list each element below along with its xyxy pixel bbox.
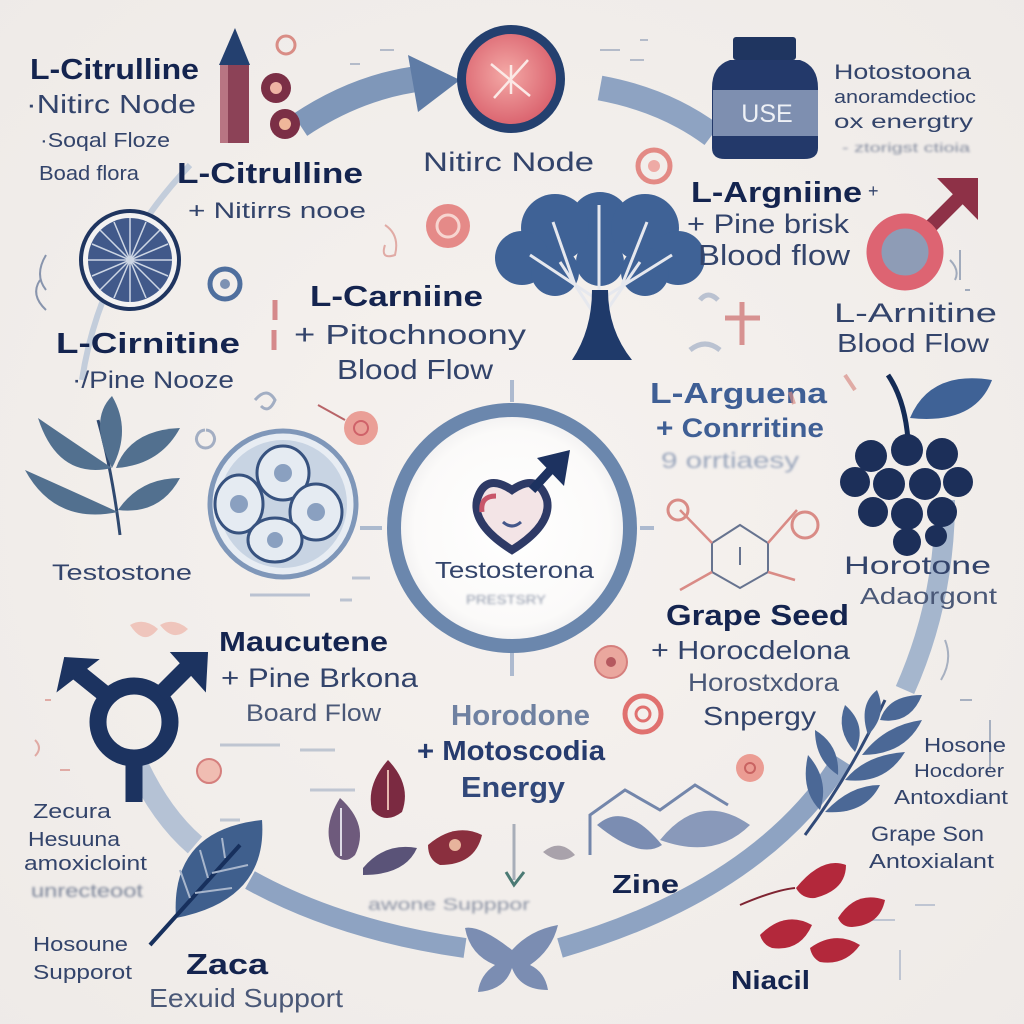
text: L-Cirnitine left: L-Cirnitine — [56, 328, 240, 360]
text: L-Citrulline block top left: Boad flora — [39, 163, 140, 185]
text: Testostone left: Testostone — [52, 560, 192, 585]
text: hormone top right: Hotostoona — [834, 61, 971, 84]
icon: heart male symbol — [476, 450, 570, 550]
text: L-Citrulline center: L-Citrulline — [177, 158, 363, 190]
text: L-Arguena: + Conrritine — [656, 413, 824, 443]
text: Zaca — [149, 949, 344, 1013]
text: Grape Seed: Horostxdora — [688, 669, 839, 697]
text: L-Arginine right: L-Argniine — [691, 177, 862, 209]
cycle arrows ring — [82, 78, 945, 948]
icon: leaf sprig left — [25, 396, 180, 535]
icon: red target circles — [210, 150, 670, 299]
text: Zacura left — [24, 801, 148, 984]
icon: supplement jar: USE — [741, 100, 793, 128]
text: Maucutene left: Board Flow — [246, 700, 382, 727]
text: Maucutene left: + Pine Brkona — [221, 663, 419, 693]
text: blurred hormone support: awone Supppor — [368, 895, 530, 914]
text: L-Carnitine center: L-Carniine — [310, 281, 483, 313]
icon: leaf sprig right — [805, 690, 922, 835]
icon: tree — [495, 192, 705, 360]
icon: molecule — [668, 500, 818, 590]
text: Zacura left: Supporot — [33, 962, 133, 984]
text: L-Arginine right: + — [868, 181, 879, 201]
text: Horodone centre: Energy — [461, 772, 565, 804]
central hub — [394, 410, 630, 646]
text: hormone antioxidant right: Antoxialant — [869, 851, 995, 873]
icon: small arrow down — [506, 824, 524, 885]
central hub: PRESTSRY — [466, 592, 546, 607]
text: hormone antioxidant right: Grape Son — [871, 823, 984, 846]
text: Grape Seed: Snpergy — [703, 701, 816, 731]
text: L-Arguena: 9 orrtiaesy — [661, 448, 799, 473]
icon: citrus slice — [81, 211, 179, 309]
text: Grape Seed: + Horocdelona — [651, 635, 851, 665]
icon: small coral circles — [197, 646, 764, 783]
text: Horotone Adaptogen right: Adaorgont — [860, 583, 998, 609]
icon: red goji berries — [740, 863, 885, 963]
text: Zacura left: amoxicloint — [24, 853, 148, 875]
text: L-Arguena: L-Arguena — [650, 378, 828, 410]
text: Horodone centre — [417, 700, 605, 804]
text: Zaca: Eexuid Support — [149, 983, 344, 1013]
icon: molecular leaves — [590, 785, 750, 855]
text: L-Arnitine right — [834, 298, 997, 358]
text: Horodone centre: + Motoscodia — [417, 735, 605, 766]
arrowhead: top — [408, 55, 460, 112]
text: Grape Seed — [651, 600, 851, 731]
text: hormone top right: anoramdectioc — [834, 87, 976, 107]
icon: small capsule rings — [261, 36, 300, 139]
text: Zacura left: Zecura — [33, 801, 112, 823]
text: L-Arginine right: Blood flow — [698, 240, 851, 272]
text: Zine: Zine — [612, 869, 679, 899]
text: L-Citrulline center — [177, 158, 366, 223]
text: Horotone Adaptogen right — [844, 552, 998, 609]
text: Horotone Adaptogen right: Horotone — [844, 552, 991, 580]
text: Zaca: Zaca — [186, 949, 269, 981]
text: Maucutene left: Maucutene — [219, 626, 388, 657]
text: L-Arguena — [650, 378, 828, 473]
text: L-Citrulline block top left: ·Nitirc Node — [26, 89, 196, 119]
text: L-Cirnitine left: ·/Pine Nooze — [72, 367, 234, 394]
text: hormone antioxidant right — [869, 735, 1009, 873]
text: L-Arnitine right: L-Arnitine — [834, 298, 997, 328]
icon: nitric node circle — [457, 25, 565, 133]
icon: supplement jar — [712, 37, 818, 159]
text: hormone antioxidant right: Hocdorer — [914, 761, 1004, 781]
text: L-Carnitine center: + Pitochnoony — [294, 319, 526, 350]
text: L-Arnitine right: Blood Flow — [837, 328, 989, 358]
text: L-Arginine right: + Pine brisk — [687, 209, 850, 239]
text: hormone top right: ox energtry — [834, 112, 974, 133]
text: L-Carnitine center: Blood Flow — [337, 354, 494, 385]
text: hormone top right: - ztorigst ctioia — [842, 140, 971, 155]
text: L-Carnitine center — [294, 281, 526, 385]
text: hormone antioxidant right: Antoxdiant — [894, 787, 1009, 809]
icon: red target small — [318, 405, 378, 445]
icon: seeds — [329, 760, 575, 875]
text: L-Citrulline block top left: ·Soqal Floze — [40, 130, 170, 152]
text: L-Cirnitine left — [56, 328, 240, 394]
central hub: Testosterona — [435, 557, 594, 583]
icon: grape bunch — [840, 375, 992, 556]
text: Grape Seed: Grape Seed — [666, 600, 849, 632]
text: Horodone centre: Horodone — [451, 700, 590, 732]
text: L-Citrulline block top left: L-Citrulline — [30, 54, 199, 86]
icon: big leaf lower left — [150, 820, 262, 945]
text: Zacura left: Hosoune — [33, 934, 128, 956]
text: Maucutene left — [219, 626, 419, 727]
text: Niacil: Niacil — [731, 965, 810, 995]
text: hormone top right — [834, 61, 976, 155]
icon: capsule tube — [219, 28, 250, 143]
icon: cell circle — [210, 431, 356, 577]
text: Nitric Node: Nitirc Node — [423, 147, 594, 177]
text: Zacura left: Hesuuna — [28, 829, 121, 851]
text: L-Citrulline block top left — [26, 54, 199, 185]
icon: bottom bow leaf — [465, 925, 558, 992]
icon: gender symbol — [58, 653, 207, 802]
text: L-Arginine right — [687, 177, 879, 272]
text: hormone antioxidant right: Hosone — [924, 735, 1006, 757]
icon: male symbol red — [874, 178, 978, 283]
text: L-Citrulline center: + Nitirrs nooe — [188, 198, 366, 223]
text: Zacura left: unrecteoot — [31, 881, 143, 901]
